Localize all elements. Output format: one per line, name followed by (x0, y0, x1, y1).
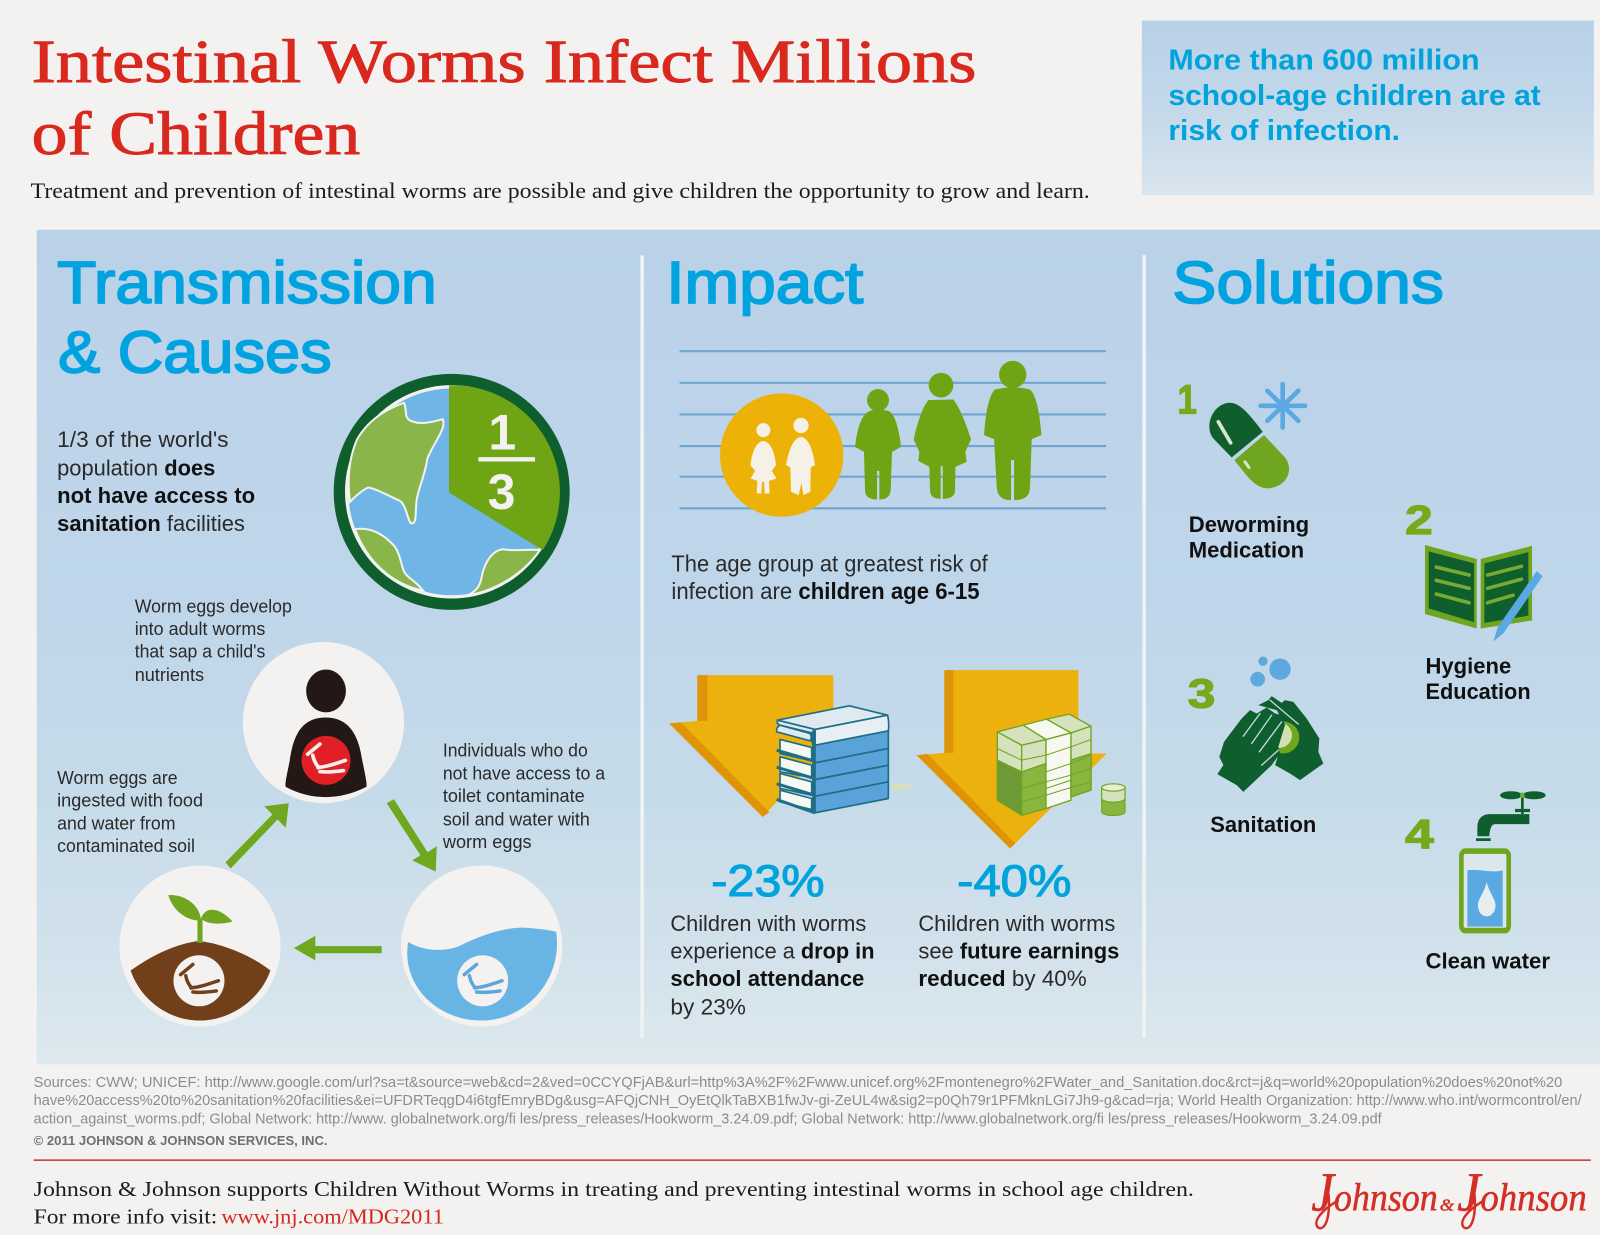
solution 1: deworming medication (1178, 376, 1309, 562)
text: footer statement: For more info visit: (34, 1205, 217, 1229)
logo: johnson and johnson: Johnson (1457, 1161, 1587, 1222)
text: individuals contaminate: worm eggs (442, 831, 532, 852)
fraction one third (488, 404, 516, 520)
heading: transmission and causes: Transmission (57, 249, 437, 316)
logo: johnson and johnson: & (1440, 1195, 1455, 1214)
solution 2: hygiene education: Hygiene (1426, 654, 1511, 679)
text: worm eggs develop: nutrients (135, 664, 204, 685)
text: copyright: © 2011 JOHNSON & JOHNSON SERVICES, INC. (34, 1133, 328, 1148)
text: worm eggs develop (135, 595, 292, 685)
icon: person with worms (243, 642, 404, 803)
text: worm eggs develop: into adult worms (135, 618, 265, 639)
text: sources: Sources: CWW; UNICEF: http://www.google.com/url?sa=t&source=web&cd=2&ved=0CCYQFjAB&url=http%3A%2F%2Fwww.unicef.org%2Fmontenegro%2FWater_and_Sanitation.doc&rct=j&q=world%20population%20does%20not%20 (34, 1075, 1562, 1091)
solution 4: clean water (1405, 791, 1550, 974)
panel: impact (666, 249, 1125, 1019)
chart: at-risk age group figures (720, 361, 1041, 517)
text: worm eggs ingested: contaminated soil (57, 835, 195, 856)
solution 4: clean water: Clean water (1426, 949, 1550, 974)
text: worm eggs ingested (57, 767, 203, 856)
solution 2: hygiene education (1405, 497, 1543, 704)
stat: minus 40 percent: -40% (957, 855, 1071, 906)
chart: earnings drop arrow with money (917, 670, 1125, 849)
title: Intestinal Worms Infect Millions (32, 28, 977, 96)
title (32, 28, 977, 168)
text: earnings: reduced by 40% (918, 966, 1087, 991)
icon: green figures (855, 361, 1041, 500)
fraction one third: 1 (488, 404, 516, 460)
text: worm eggs ingested: Worm eggs are (57, 767, 178, 788)
text: sources (34, 1075, 1583, 1128)
text: earnings: see future earnings (918, 938, 1119, 963)
text: attendance: school attendance (670, 966, 864, 991)
subtitle: Treatment and prevention of intestinal worms are possible and give children the opportunity to grow and learn. (31, 178, 1090, 203)
arrow: down (917, 670, 1107, 849)
arrow: soil to person (226, 803, 289, 869)
text: attendance: experience a drop in (670, 938, 874, 963)
solution 3: sanitation (1188, 656, 1323, 837)
stat: minus 23 percent: -23% (711, 855, 824, 906)
text: sanitation statistic: population does (57, 456, 215, 481)
fraction one third: 3 (488, 464, 515, 520)
text: individuals contaminate: soil and water with (443, 809, 590, 830)
icon: pill (1209, 384, 1305, 488)
icon: coin stack (1102, 784, 1125, 815)
text: attendance (670, 911, 874, 1019)
icon: stack of books (777, 706, 889, 813)
icon: washing hands (1217, 656, 1323, 792)
text: worm eggs ingested: ingested with food (57, 789, 203, 810)
solution 2: hygiene education: Education (1426, 679, 1531, 704)
callout: 600 million children: risk of infection. (1168, 115, 1400, 147)
text: sources: action_against_worms.pdf; Global Network: http://www. globalnetwork.org/fi les/press_releases/Hookworm_3.24.09.pdf; Global Network: http://www.globalnetwork.org/fi les/press_releases/Hookworm_3.24.09.pdf (34, 1112, 1382, 1128)
text: sanitation statistic (57, 427, 255, 536)
solution 3: sanitation: Sanitation (1210, 812, 1316, 837)
text: footer statement: www.jnj.com/MDG2011 (221, 1205, 444, 1229)
title: of Children (32, 100, 360, 168)
text: footer statement (34, 1177, 1194, 1229)
icon: open book and pencil (1425, 545, 1543, 641)
text: sanitation statistic: sanitation facilities (57, 511, 245, 536)
solution 4: clean water: 4 (1405, 811, 1434, 857)
text: attendance: Children with worms (670, 911, 866, 936)
text: age group at risk (671, 551, 988, 604)
callout: 600 million children: school-age children are at (1168, 80, 1541, 112)
icon: faucet and glass (1461, 791, 1546, 931)
solution 3: sanitation: 3 (1188, 670, 1215, 716)
arrow: person to water (387, 799, 437, 872)
text: worm eggs ingested: and water from (57, 813, 176, 834)
solution 1: deworming medication: 1 (1178, 376, 1197, 422)
text: earnings (918, 911, 1119, 991)
text: worm eggs develop: Worm eggs develop (135, 595, 292, 616)
icon: globe with one third wedge (334, 374, 570, 610)
text: age group at risk: The age group at greatest risk of (671, 551, 988, 577)
text: age group at risk: infection are children age 6-15 (671, 578, 980, 604)
icon: money stack (997, 714, 1091, 815)
heading: transmission and causes (57, 249, 437, 386)
text: worm eggs develop: that sap a child's (135, 640, 265, 661)
arrow: down (669, 675, 911, 817)
solution 1: deworming medication: Deworming (1189, 512, 1309, 537)
text: sources: have%20access%20to%20sanitation%20facilities&ei=UFDRTeqgD4i6tgfEmryBDg&usg=AFQjCNH_OyEtQlkTaBXB1fwJv-gi-ZeUL4w&sig2=p0Qh79r1PFMknLGi7Jh9-g&cad=rja; World Health Organization: http://www.who.int/wormcontrol/en/ (34, 1093, 1583, 1109)
text: footer statement: Johnson & Johnson supports Children Without Worms in treating and preventing intestinal worms in school age children. (34, 1177, 1194, 1201)
main panel background (37, 230, 1600, 1064)
solution 1: deworming medication: Medication (1189, 537, 1304, 562)
text: attendance: by 23% (670, 994, 746, 1019)
text: individuals contaminate: toilet contaminate (443, 785, 585, 806)
text: sanitation statistic: 1/3 of the world's (57, 427, 229, 452)
icon: yellow circle with children (720, 393, 843, 517)
heading: solutions: Solutions (1172, 249, 1444, 316)
heading: impact: Impact (666, 249, 863, 316)
callout: 600 million children (1142, 21, 1594, 195)
heading: transmission and causes: & Causes (58, 319, 332, 386)
text: earnings: Children with worms (918, 911, 1115, 936)
callout: 600 million children: More than 600 million (1168, 45, 1480, 77)
logo: johnson and johnson: Johnson (1311, 1161, 1438, 1222)
chart: attendance drop arrow with books (669, 675, 911, 817)
text: individuals contaminate: Individuals who do (443, 739, 588, 760)
panel: transmission and causes (57, 249, 606, 1027)
text: individuals contaminate: not have access to a (443, 763, 606, 784)
text: individuals contaminate (442, 739, 606, 852)
icon: water with worms (401, 865, 562, 1027)
text: sanitation statistic: not have access to (57, 483, 255, 508)
panel: solutions (1172, 249, 1550, 974)
logo: johnson and johnson (1311, 1161, 1587, 1228)
arrow: water to soil (294, 936, 382, 960)
icon: soil with worms and sprout (119, 865, 281, 1027)
solution 2: hygiene education: 2 (1405, 497, 1433, 543)
